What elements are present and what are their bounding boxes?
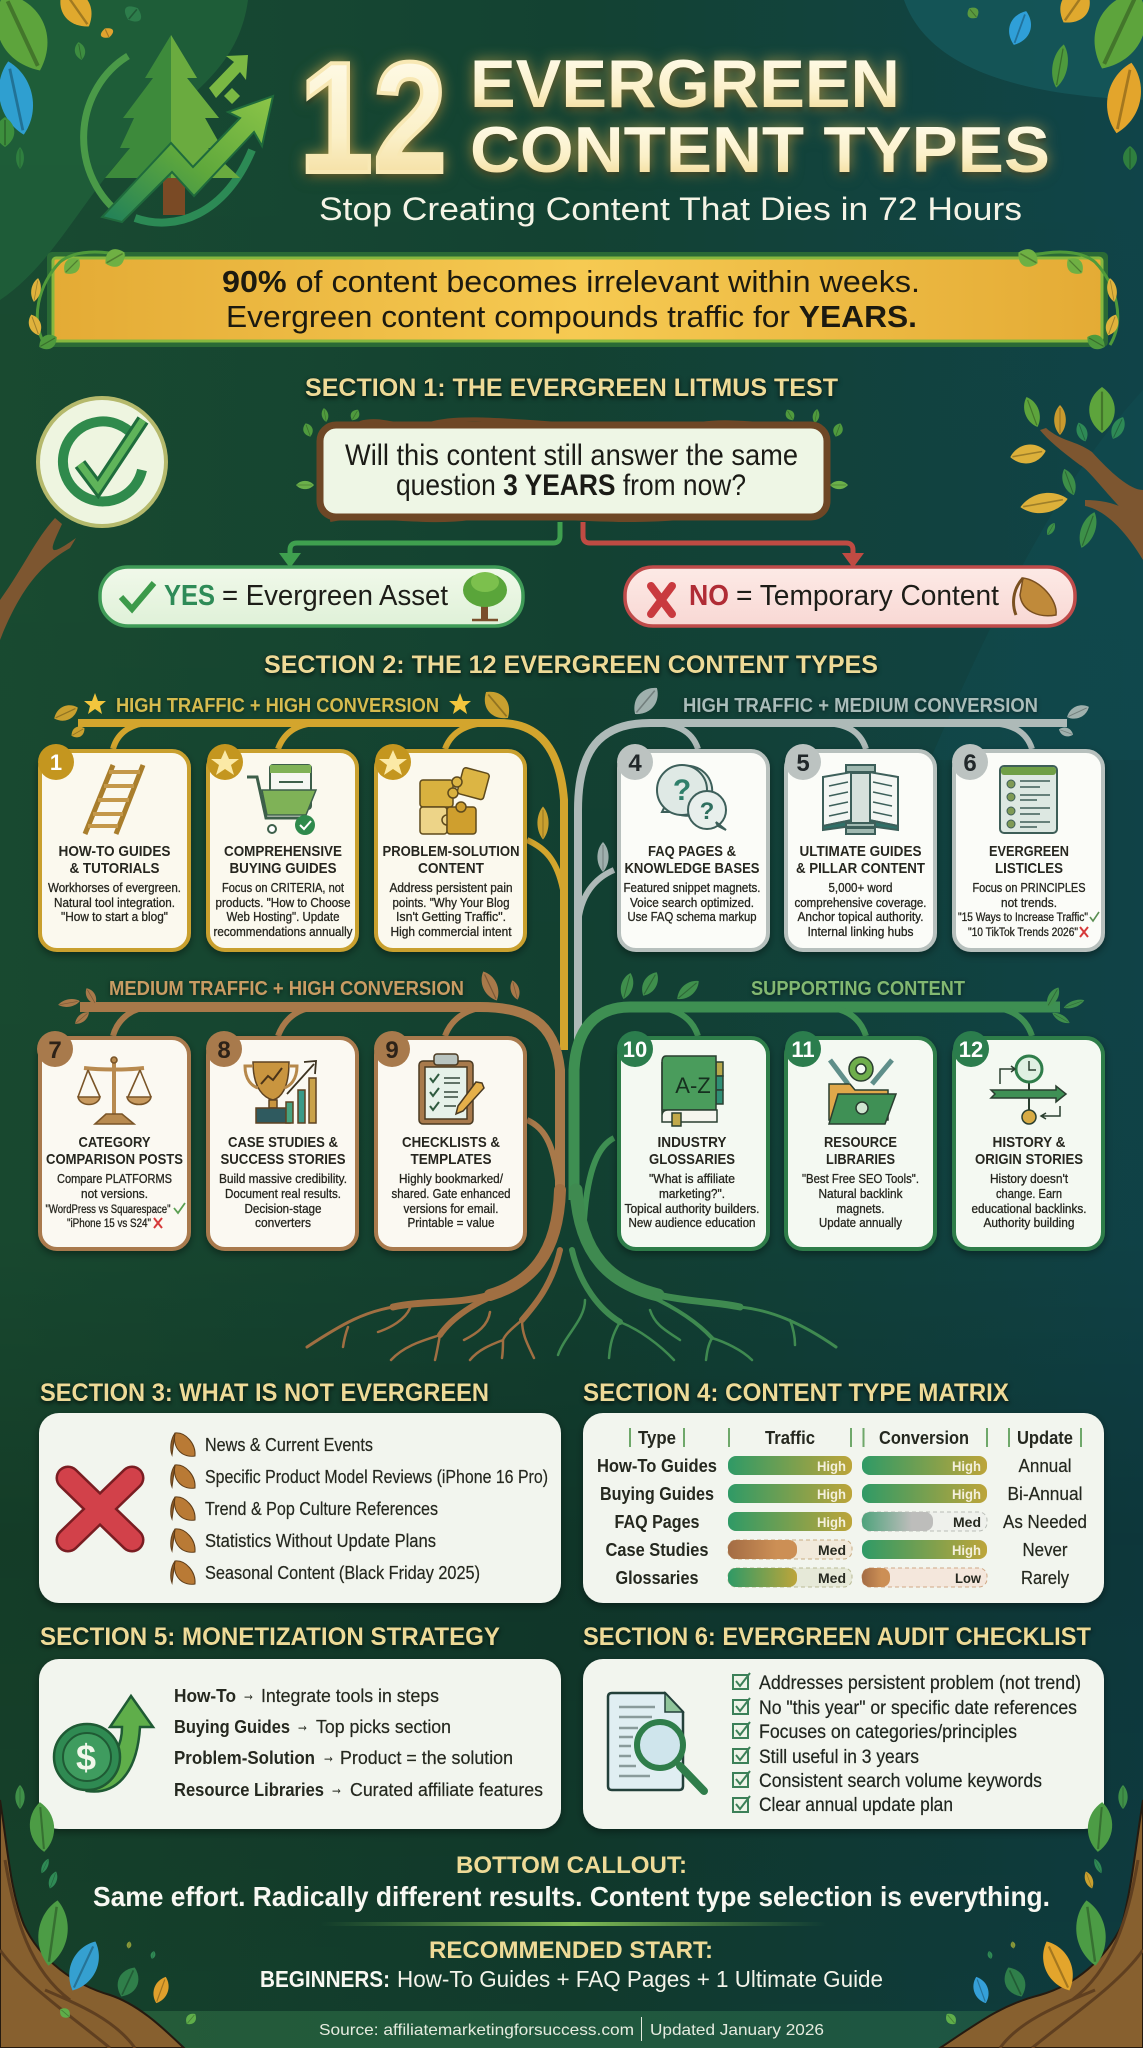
row: how-to guides: Annual	[1018, 1456, 1072, 1476]
description	[624, 880, 760, 924]
row: case studies	[606, 1540, 1068, 1560]
title: 12	[299, 30, 447, 206]
card 4: faq pages	[617, 744, 768, 950]
card 5: ultimate guides	[785, 744, 935, 950]
strategy lines: Buying Guides	[174, 1717, 290, 1737]
description: 5,000+ word	[828, 880, 892, 895]
strategy lines: Top picks section	[316, 1717, 451, 1737]
description	[219, 1171, 347, 1230]
card 1: how-to guides	[38, 744, 189, 950]
checklist: Focuses on categories/principles	[759, 1722, 1017, 1743]
badge 4: 4	[628, 750, 642, 777]
description	[624, 1171, 760, 1230]
card 3: problem-solution	[375, 744, 525, 950]
banner text	[222, 264, 920, 334]
description: Use FAQ schema markup	[628, 909, 756, 924]
description: Featured snippet magnets.	[624, 880, 760, 895]
title	[224, 843, 342, 877]
title	[220, 1134, 346, 1168]
description: Decision-stage	[244, 1201, 322, 1216]
frame leaves	[296, 408, 848, 489]
title: LISTICLES	[995, 860, 1063, 877]
description: Focus on PRINCIPLES	[972, 880, 1086, 895]
description: "WordPress vs Squarespace"	[46, 1204, 170, 1216]
roots: brown	[307, 1190, 560, 1360]
title: COMPARISON POSTS	[46, 1151, 183, 1168]
row: case studies: High	[952, 1542, 981, 1558]
badge 11: 11	[791, 1037, 815, 1062]
description: Internal linking hubs	[808, 924, 914, 939]
recommended start	[260, 1937, 883, 1992]
panel: monetization strategy	[39, 1659, 561, 1829]
description	[958, 880, 1099, 939]
description: High commercial intent	[390, 924, 512, 939]
banner text: 90% of content becomes irrelevant within weeks.	[222, 264, 920, 299]
row: faq pages: Med	[953, 1514, 981, 1530]
title: CONTENT	[418, 860, 484, 877]
description: Authority building	[984, 1215, 1074, 1230]
icon: folder with tools	[829, 1057, 896, 1124]
sub-heading: medium traffic high conversion: MEDIUM TRAFFIC + HIGH CONVERSION	[109, 978, 464, 1000]
description: New audience education	[628, 1215, 756, 1230]
leaves on branches	[51, 682, 1091, 1027]
title: LIBRARIES	[826, 1151, 895, 1168]
table header: Traffic	[765, 1428, 815, 1448]
card 7: category comparison	[37, 1031, 189, 1249]
description: magnets.	[836, 1201, 884, 1216]
arrow: yes path	[279, 522, 560, 568]
badge 7: 7	[48, 1037, 62, 1064]
icon: question bubbles: ?	[673, 774, 691, 807]
description: points. "Why Your Blog	[392, 895, 510, 910]
badge 10	[617, 1031, 653, 1067]
icon: red x	[651, 586, 672, 614]
badge 1	[38, 744, 74, 780]
description: marketing?".	[659, 1186, 725, 1201]
icon: dollar coin with arrow: $	[76, 1737, 96, 1778]
title: CASE STUDIES &	[228, 1134, 338, 1151]
row: case studies: Med	[818, 1542, 846, 1558]
no pill	[625, 567, 1075, 626]
card 12: history	[953, 1031, 1103, 1249]
icon: wilted leaf	[1014, 578, 1056, 616]
branch: left with check medallion	[0, 398, 166, 640]
icon: evergreen tree logo with growth arrow	[84, 35, 273, 223]
source line: Source: affiliatemarketingforsuccess.com	[319, 2022, 634, 2039]
description: converters	[255, 1215, 311, 1230]
arrow: no path	[583, 522, 864, 568]
branch: right tree with leaves	[1009, 387, 1143, 560]
description: "10 TikTok Trends 2026"	[968, 927, 1078, 939]
title: CHECKLISTS &	[402, 1134, 500, 1151]
badge 1: 1	[50, 750, 62, 775]
title: TEMPLATES	[410, 1151, 492, 1168]
title: CATEGORY	[78, 1134, 150, 1151]
title: HISTORY &	[992, 1134, 1066, 1151]
card 2: buying guides	[207, 744, 357, 950]
description: Natural tool integration.	[54, 895, 175, 910]
branch: silver	[578, 723, 1067, 1050]
badge 9: 9	[385, 1037, 399, 1064]
list items: News & Current Events	[205, 1435, 373, 1455]
title: ORIGIN STORIES	[975, 1151, 1083, 1168]
badge 6: 6	[963, 750, 977, 777]
title: & TUTORIALS	[70, 860, 160, 877]
strategy lines: →	[242, 1684, 255, 1704]
icon: tree	[463, 572, 507, 620]
title: FAQ PAGES &	[648, 843, 736, 860]
table header: Conversion	[879, 1428, 969, 1448]
description	[46, 1171, 185, 1230]
description: not versions.	[81, 1186, 148, 1201]
icon: red x	[68, 1478, 132, 1540]
badge 6	[952, 744, 988, 780]
badge 5: 5	[796, 750, 810, 777]
row: faq pages: High	[817, 1514, 846, 1530]
description: Anchor topical authority.	[798, 909, 924, 924]
litmus question box: question 3 YEARS from now?	[396, 469, 746, 502]
panel: content type matrix	[583, 1413, 1104, 1603]
title: KNOWLEDGE BASES	[624, 860, 760, 877]
table header: Update	[1017, 1428, 1073, 1448]
card 9: checklists	[374, 1031, 525, 1249]
list items: Specific Product Model Reviews (iPhone 16 Pro)	[205, 1467, 548, 1487]
description: "15 Ways to Increase Traffic"	[958, 912, 1088, 924]
strategy lines: →	[322, 1746, 335, 1766]
description: Voice search optimized.	[630, 895, 754, 910]
row: buying guides: High	[952, 1486, 981, 1502]
description: "Best Free SEO Tools".	[802, 1171, 919, 1186]
title	[58, 843, 170, 877]
description	[802, 1171, 919, 1230]
title: RESOURCE	[824, 1134, 897, 1151]
heading: section 2: SECTION 2: THE 12 EVERGREEN CONTENT TYPES	[264, 651, 878, 679]
badge 12: 12	[959, 1037, 983, 1062]
row: buying guides: High	[817, 1486, 846, 1502]
title	[796, 843, 925, 877]
bottom callout	[93, 1852, 1050, 1912]
icon: document with magnifier	[608, 1693, 704, 1791]
no pill: NO	[689, 580, 729, 612]
description: "How to start a blog"	[61, 909, 168, 924]
recommended start: BEGINNERS:	[260, 1966, 390, 1992]
icon: dollar coin with arrow	[54, 1696, 153, 1791]
badge 8: 8	[217, 1037, 231, 1064]
title: CONTENT TYPES	[470, 113, 1050, 186]
title: GLOSSARIES	[649, 1151, 735, 1168]
row: how-to guides: How-To Guides	[597, 1456, 717, 1476]
strategy lines	[174, 1684, 543, 1800]
strategy lines: Problem-Solution	[174, 1748, 315, 1768]
row: how-to guides: High	[817, 1458, 846, 1474]
yes pill: YES	[164, 580, 215, 612]
icon: puzzle pieces	[420, 767, 490, 834]
title	[382, 843, 520, 877]
description: Focus on CRITERIA, not	[222, 880, 344, 895]
description: Web Hosting". Update	[226, 909, 340, 924]
icon: question bubbles: ?	[700, 798, 714, 825]
description: recommendations annually	[214, 924, 353, 939]
source line	[319, 2017, 824, 2041]
heading: section 5: SECTION 5: MONETIZATION STRATEGY	[40, 1623, 500, 1651]
description: Address persistent pain	[390, 880, 512, 895]
description	[392, 1171, 510, 1230]
badge 9	[374, 1031, 410, 1067]
strategy lines: →	[296, 1715, 309, 1735]
description: Document real results.	[225, 1186, 341, 1201]
banner text: Evergreen content compounds traffic for YEARS.	[226, 299, 917, 334]
yes pill	[100, 567, 523, 626]
no pill: = Temporary Content	[736, 580, 999, 612]
title: BUYING GUIDES	[230, 860, 336, 877]
title: INDUSTRY	[658, 1134, 726, 1151]
bottom callout: Same effort. Radically different results. Content type selection is everything.	[93, 1881, 1050, 1912]
row: buying guides: Buying Guides	[600, 1484, 714, 1504]
description	[214, 880, 353, 939]
title: COMPREHENSIVE	[224, 843, 342, 860]
title	[824, 1134, 897, 1168]
icon: question bubbles	[657, 765, 726, 830]
row: glossaries: Glossaries	[616, 1568, 698, 1588]
description: Update annually	[819, 1215, 902, 1230]
subtitle: Stop Creating Content That Dies in 72 Hours	[319, 191, 1022, 227]
title: EVERGREEN	[989, 843, 1069, 860]
icon: ladder	[85, 765, 143, 834]
description: not trends.	[1001, 895, 1057, 910]
description: "iPhone 15 vs S24"	[67, 1218, 151, 1230]
badge 7	[37, 1031, 73, 1067]
footer band	[0, 2011, 1143, 2048]
description: Topical authority builders.	[624, 1201, 760, 1216]
badge 12	[953, 1031, 989, 1067]
row: buying guides: Bi-Annual	[1008, 1484, 1082, 1504]
badge star	[207, 744, 243, 780]
checklist	[733, 1673, 1081, 1816]
description: change. Earn	[996, 1186, 1062, 1201]
icon: shopping cart with list	[247, 765, 316, 835]
title: PROBLEM-SOLUTION	[382, 843, 520, 860]
strategy lines: Curated affiliate features	[350, 1780, 543, 1800]
icon: balance scale	[78, 1057, 151, 1124]
card 10: glossaries	[617, 1031, 768, 1249]
card 6: evergreen listicles	[952, 744, 1103, 950]
title: SUCCESS STORIES	[220, 1151, 346, 1168]
row: glossaries	[616, 1568, 1069, 1588]
recommended start: RECOMMENDED START:	[429, 1937, 713, 1964]
row: buying guides	[600, 1484, 1082, 1504]
icon: glossary book	[662, 1056, 723, 1126]
badge 5	[785, 744, 821, 780]
checklist: Consistent search volume keywords	[759, 1771, 1042, 1792]
heading: section 1: SECTION 1: THE EVERGREEN LITMUS TEST	[305, 374, 838, 402]
heading: section 6: SECTION 6: EVERGREEN AUDIT CHECKLIST	[583, 1623, 1091, 1651]
description: Highly bookmarked/	[399, 1171, 503, 1186]
title: EVERGREEN	[470, 46, 900, 122]
leaves: top-right corner	[965, 0, 1143, 170]
title: HOW-TO GUIDES	[58, 843, 170, 860]
divider	[321, 1922, 827, 1926]
branch: green	[574, 1007, 1060, 1220]
title	[975, 1134, 1083, 1168]
row: case studies: Never	[1022, 1540, 1068, 1560]
icon: book with pillar	[823, 765, 898, 834]
description	[48, 880, 181, 924]
branch: brown	[80, 1007, 560, 1200]
description: "What is affiliate	[649, 1171, 735, 1186]
title	[46, 1134, 183, 1168]
list items	[171, 1433, 548, 1584]
leaves: top-left corner	[0, 0, 145, 169]
strategy lines: →	[330, 1778, 343, 1798]
icon: list window	[1000, 766, 1057, 833]
yes pill: = Evergreen Asset	[222, 580, 448, 612]
recommended start: How-To Guides + FAQ Pages + 1 Ultimate Guide	[397, 1966, 883, 1992]
banner callout	[26, 245, 1121, 353]
badge 4	[617, 744, 653, 780]
sub-heading: supporting content: SUPPORTING CONTENT	[751, 978, 965, 1000]
title	[299, 30, 1050, 206]
description: educational backlinks.	[972, 1201, 1086, 1216]
strategy lines: Product = the solution	[340, 1748, 513, 1768]
title	[989, 843, 1069, 877]
title: ULTIMATE GUIDES	[800, 843, 922, 860]
description: Natural backlink	[818, 1186, 903, 1201]
strategy lines: Resource Libraries	[174, 1780, 324, 1800]
banner leaves	[26, 245, 1121, 353]
description: products. "How to Choose	[216, 895, 350, 910]
description: Compare PLATFORMS	[57, 1171, 172, 1186]
table header: Type	[638, 1428, 676, 1448]
checklist: Clear annual update plan	[759, 1795, 953, 1816]
row: how-to guides	[597, 1456, 1072, 1476]
sub-heading: high traffic high conversion: HIGH TRAFFIC + HIGH CONVERSION	[116, 695, 439, 717]
badge star	[375, 744, 411, 780]
description	[390, 880, 512, 939]
strategy lines: How-To	[174, 1686, 236, 1706]
description: Printable = value	[408, 1215, 494, 1230]
description: versions for email.	[404, 1201, 498, 1216]
panel: what is not evergreen	[39, 1413, 561, 1603]
tree: branches and trunk	[78, 723, 1067, 1360]
row: faq pages: As Needed	[1003, 1512, 1087, 1532]
description: comprehensive coverage.	[794, 895, 926, 910]
description: History doesn't	[990, 1171, 1068, 1186]
badge 10: 10	[623, 1037, 647, 1062]
title	[624, 843, 760, 877]
checklist: Still useful in 3 years	[759, 1747, 919, 1768]
row: glossaries: Low	[955, 1570, 981, 1586]
row: glossaries: Med	[818, 1570, 846, 1586]
icon: glossary book: A-Z	[675, 1073, 711, 1098]
source line: Updated January 2026	[650, 2022, 824, 2039]
badge 11	[785, 1031, 821, 1067]
checklist: Addresses persistent problem (not trend)	[759, 1673, 1081, 1694]
tree: bottom-right trunk and leaves	[940, 1785, 1143, 2048]
card 8: case studies	[206, 1031, 357, 1249]
card 11: resource libraries	[785, 1031, 935, 1249]
description: Build massive credibility.	[219, 1171, 347, 1186]
tree: bottom-left trunk and leaves	[0, 1785, 199, 2048]
icon: trophy with bars	[245, 1061, 316, 1123]
strategy lines: Integrate tools in steps	[261, 1686, 439, 1706]
description: Isn't Getting Traffic".	[396, 909, 506, 924]
checklist: No "this year" or specific date references	[759, 1698, 1077, 1719]
list items: Trend & Pop Culture References	[205, 1499, 438, 1519]
row: case studies: Case Studies	[606, 1540, 708, 1560]
litmus question box	[296, 408, 848, 520]
branch: gold	[78, 723, 564, 1050]
row: how-to guides: High	[952, 1458, 981, 1474]
litmus question box: Will this content still answer the same	[345, 439, 798, 472]
row: faq pages: FAQ Pages	[614, 1512, 700, 1532]
sub-heading: high traffic medium conversion: HIGH TRAFFIC + MEDIUM CONVERSION	[683, 695, 1038, 717]
bottom callout: BOTTOM CALLOUT:	[456, 1852, 687, 1879]
row: faq pages	[614, 1512, 1087, 1532]
icon: clock timeline	[991, 1056, 1066, 1124]
list items: Seasonal Content (Black Friday 2025)	[205, 1563, 480, 1583]
table header	[630, 1428, 1081, 1448]
title: & PILLAR CONTENT	[796, 860, 925, 877]
heading: section 3: SECTION 3: WHAT IS NOT EVERGREEN	[40, 1379, 489, 1407]
row: glossaries: Rarely	[1021, 1568, 1069, 1588]
description: Workhorses of evergreen.	[48, 880, 181, 895]
badge 8	[206, 1031, 242, 1067]
title	[649, 1134, 735, 1168]
icon: check mark in ring	[63, 420, 143, 501]
title	[402, 1134, 500, 1168]
heading: section 4: SECTION 4: CONTENT TYPE MATRIX	[583, 1379, 1009, 1407]
icon: green check	[121, 583, 154, 609]
description: shared. Gate enhanced	[392, 1186, 510, 1201]
panel: audit checklist	[583, 1659, 1104, 1829]
list items: Statistics Without Update Plans	[205, 1531, 436, 1551]
roots: green	[558, 1190, 836, 1360]
description	[972, 1171, 1086, 1230]
description	[794, 880, 926, 939]
icon: clipboard and pencil	[419, 1054, 484, 1124]
